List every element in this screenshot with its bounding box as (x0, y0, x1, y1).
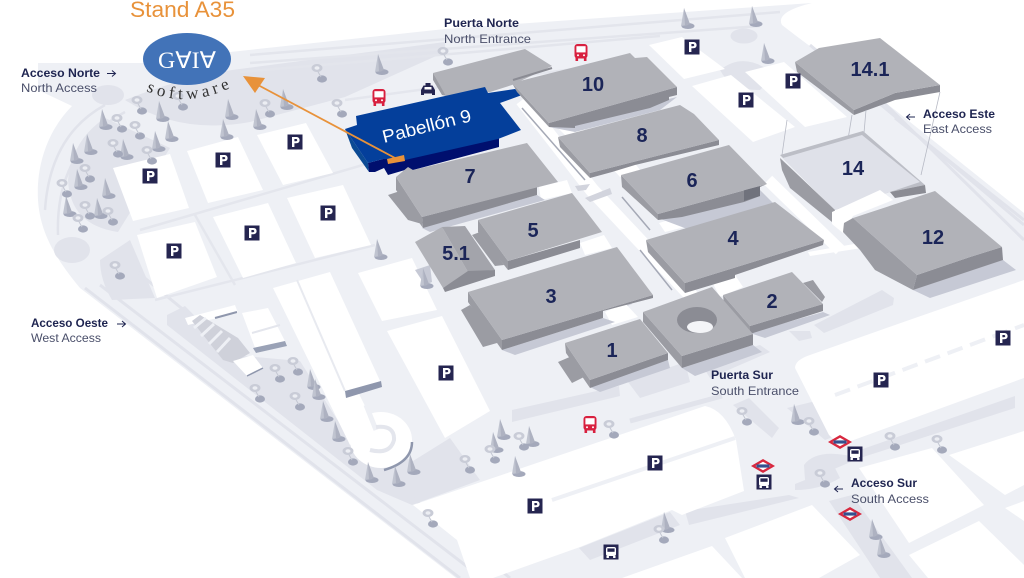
bus stop markers (604, 446, 862, 560)
west service buildings (185, 305, 287, 376)
label: west access: Acceso Oeste (31, 316, 108, 330)
building: pavilion 5 (472, 193, 602, 270)
label Pabellón 9: Pabellón 9 (380, 105, 473, 147)
building: pavilion 2 (723, 272, 825, 334)
icon: taxi (421, 83, 435, 95)
parking markers (142, 40, 1010, 514)
metro signs (751, 435, 862, 521)
label: south entrance (711, 368, 799, 398)
label: north entrance: North Entrance (444, 32, 531, 46)
ramp to pavilion 12 (808, 243, 862, 256)
building: Pabellón 9 highlighted (345, 87, 522, 175)
number 12: 12 (922, 227, 944, 249)
building: north annex (433, 49, 552, 98)
red bus icons (372, 44, 596, 433)
label: east access: Acceso Este (923, 107, 995, 121)
building: pavilion 7 (388, 143, 558, 232)
building: pavilion 14 (780, 131, 926, 222)
number 14: 14 (842, 158, 865, 180)
building: pavilion 1 (558, 319, 668, 388)
white entrance plazas (539, 120, 893, 325)
building shadows (415, 97, 1012, 392)
label: south access: Acceso Sur (851, 476, 917, 490)
number 6: 6 (686, 170, 698, 192)
label: west access: West Access (31, 331, 101, 345)
plaza between 14 and 12 (832, 190, 893, 233)
label: east access: East Access (923, 122, 992, 136)
number 10: 10 (582, 74, 604, 96)
label: north access (21, 66, 116, 95)
number 5.1: 5.1 (442, 243, 470, 265)
label: north entrance (444, 16, 531, 46)
number 1: 1 (606, 340, 618, 362)
stand marker (387, 155, 405, 164)
building: pavilion 10 (512, 53, 677, 128)
label: south entrance: Puerta Sur (711, 368, 773, 382)
number 5: 5 (527, 220, 539, 242)
label: north access: Acceso Norte (21, 66, 100, 80)
label: north access: North Access (21, 81, 97, 95)
building: central hall with courtyard (643, 287, 753, 368)
building: pavilion 14.1 (795, 38, 940, 115)
label: north entrance: Puerta Norte (444, 16, 519, 30)
building: pavilion 5.1 (415, 226, 495, 292)
company logo: software (146, 82, 230, 100)
company logo (143, 33, 231, 100)
number 14.1: 14.1 (851, 59, 889, 81)
number 7: 7 (464, 166, 476, 188)
label: west access (31, 316, 126, 345)
number 2: 2 (766, 291, 778, 313)
label: south entrance: South Entrance (711, 384, 799, 398)
building: pavilion 8 (558, 105, 719, 178)
service road dividers in parking (552, 325, 1024, 500)
building: pavilion 4 (646, 202, 824, 293)
number 3: 3 (545, 286, 557, 308)
label: south access: South Access (851, 492, 929, 506)
number 8: 8 (636, 125, 648, 147)
long service building and west roundabout (273, 272, 412, 470)
arrow from stand to logo (243, 76, 395, 158)
label: east access (906, 107, 995, 136)
building: pavilion 6 (621, 145, 767, 220)
support lines under 14.1 (782, 92, 940, 200)
label: south access (834, 476, 929, 506)
building: pavilion 3 (461, 247, 653, 350)
number 4: 4 (727, 228, 739, 250)
building: pavilion 12 (843, 191, 1016, 298)
company logo: G∀I∀ (158, 48, 216, 73)
central avenues (522, 100, 840, 310)
